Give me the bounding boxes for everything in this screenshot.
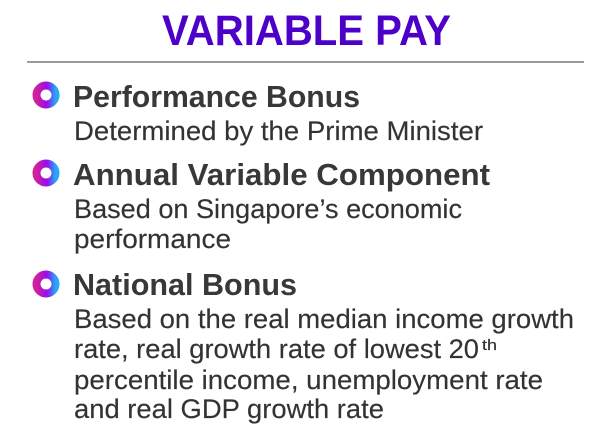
- text: annual variable component description: Based on Singapore’s economic: [74, 194, 462, 224]
- text: national bonus description: and real GDP growth rate: [74, 394, 384, 424]
- text: annual variable component description: [74, 194, 462, 254]
- text: performance bonus description: Determined by the Prime Minister: [74, 116, 483, 146]
- icon: gradient ring bullet: [36, 274, 56, 294]
- icon: gradient ring bullet: [36, 164, 56, 182]
- divider rule: [27, 61, 584, 63]
- text: national bonus description: rate, real growth rate of lowest 20: [74, 334, 479, 364]
- item: performance bonus: [36, 79, 483, 146]
- heading: performance bonus: Performance Bonus: [73, 79, 360, 114]
- title: VARIABLE PAY: [162, 7, 451, 55]
- text: national bonus description: th: [482, 337, 497, 354]
- icon: gradient ring bullet: [36, 86, 56, 104]
- text: national bonus description: percentile income, unemployment rate: [74, 365, 543, 395]
- text: national bonus description: Based on the real median income growth: [74, 304, 574, 334]
- item: national bonus: [36, 267, 574, 424]
- item: annual variable component: [36, 157, 490, 254]
- heading: national bonus: National Bonus: [73, 267, 297, 302]
- text: annual variable component description: performance: [74, 224, 231, 254]
- heading: annual variable component: Annual Variable Component: [73, 157, 490, 192]
- text: national bonus description: [74, 304, 574, 424]
